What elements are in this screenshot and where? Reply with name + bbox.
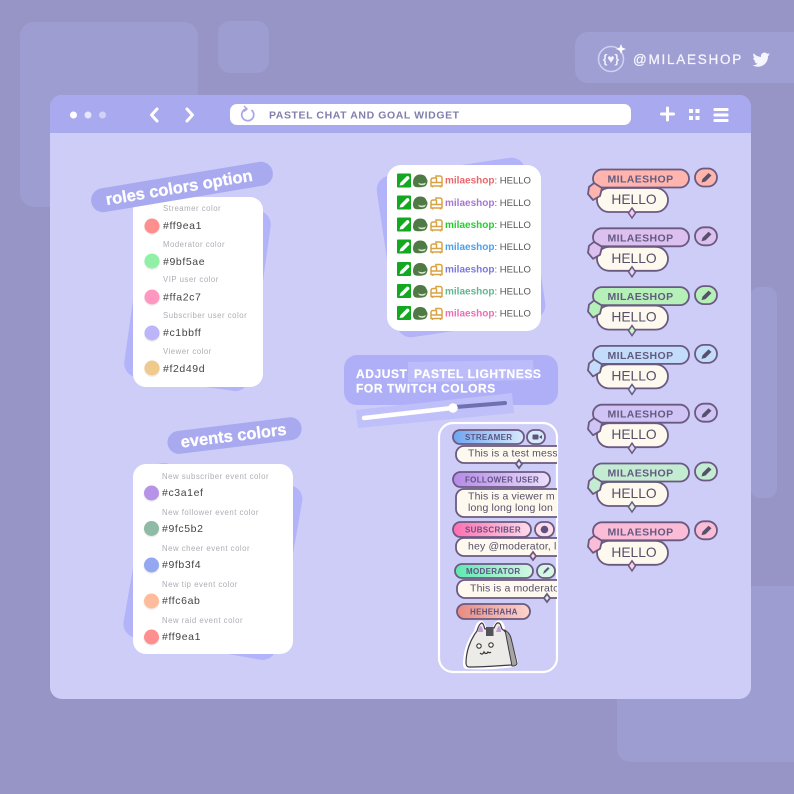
bubble: pink: HELLO <box>611 545 657 560</box>
message: moderator: This is a moderato <box>470 582 559 594</box>
bubble: mint <box>588 462 717 512</box>
message: follower user <box>452 471 557 518</box>
window controls <box>660 106 728 122</box>
event colour list: #9fb3f4 <box>162 559 201 571</box>
bubble: blue <box>588 345 717 394</box>
heading: events colors: events colors <box>180 421 288 452</box>
callout: adjust pastel lightness: ADJUST <box>356 367 408 381</box>
role colour list <box>144 204 247 377</box>
role colour list: Moderator color <box>163 240 225 249</box>
bubble: purple: HELLO <box>611 251 657 266</box>
icon: milaeshop logo <box>598 44 626 72</box>
event colour list: New follower event color <box>162 508 259 517</box>
callout: adjust pastel lightness: FOR TWITCH COLORS <box>356 382 496 396</box>
bubble: purple: MILAESHOP <box>607 232 674 244</box>
bubble: lavender: HELLO <box>611 427 657 442</box>
event colour list: New subscriber event color <box>162 472 269 481</box>
browser window <box>50 95 751 699</box>
role colour list: VIP user color <box>163 275 219 284</box>
address bar <box>230 104 631 125</box>
bubble: lavender <box>588 404 717 453</box>
bubble: mint: MILAESHOP <box>607 468 674 480</box>
event colour list <box>144 472 269 646</box>
bubble: peach: MILAESHOP <box>607 174 674 186</box>
message: subscriber <box>453 522 576 560</box>
message: follower user: FOLLOWER USER <box>465 476 539 484</box>
callout: adjust pastel lightness: PASTEL LIGHTNESS <box>414 367 542 381</box>
chat rows: milaeshop: HELLO <box>445 286 531 298</box>
bubble: blue: HELLO <box>611 368 657 383</box>
bubble: green: HELLO <box>611 310 657 325</box>
panel: events colors <box>121 416 305 662</box>
title bar <box>50 95 751 133</box>
chat rows: milaeshop: HELLO <box>445 264 531 276</box>
chat rows: milaeshop: HELLO <box>445 176 531 186</box>
pill: hehehaha: HEHEHAHA <box>470 608 518 616</box>
bubble: peach <box>588 168 717 218</box>
event colour list: #ffc6ab <box>162 595 200 607</box>
message: moderator: MODERATOR <box>466 567 520 576</box>
role colour list: Viewer color <box>163 347 212 356</box>
heading: roles colors option <box>89 160 275 214</box>
pill: hehehaha <box>457 604 530 619</box>
message: streamer: This is a test mess <box>468 448 558 460</box>
role colour list: #9bf5ae <box>163 256 205 268</box>
chat rows: milaeshop: HELLO <box>445 308 531 320</box>
panel: alert chat phone preview <box>438 422 558 674</box>
panel: roles colors option <box>89 160 275 393</box>
event colour list: New cheer event color <box>162 544 250 553</box>
event colour list: New tip event color <box>162 580 238 589</box>
role colour list: #ffa2c7 <box>163 292 201 304</box>
role colour list: Streamer color <box>163 204 221 213</box>
role colour list: #f2d49d <box>163 363 205 375</box>
bubble: pink <box>588 521 717 571</box>
heading: roles colors option: roles colors option <box>104 167 254 209</box>
handle text: @MILAESHOP <box>633 52 743 67</box>
icon: twitter bird <box>752 53 770 67</box>
heading: events colors <box>166 416 303 455</box>
bubble: peach: HELLO <box>611 192 657 207</box>
chat rows <box>397 174 531 320</box>
chat rows: milaeshop: HELLO <box>445 198 531 209</box>
lightness slider <box>356 393 514 428</box>
message: subscriber: SUBSCRIBER <box>465 526 521 534</box>
icon: cat tote bag mascot <box>463 620 518 669</box>
icon: milaeshop logo: {♥} <box>603 52 620 66</box>
bubble: green <box>588 286 717 336</box>
address bar: PASTEL CHAT AND GOAL WIDGET <box>269 110 460 122</box>
event colour list: #c3a1ef <box>162 487 204 499</box>
role colour list: #c1bbff <box>163 327 201 339</box>
message: moderator <box>454 563 557 604</box>
event colour list: New raid event color <box>162 616 243 625</box>
bubble: blue: MILAESHOP <box>607 350 674 362</box>
event colour list: #9fc5b2 <box>162 523 204 535</box>
panel: twitch chat preview <box>375 156 547 339</box>
chat rows: milaeshop: HELLO <box>445 242 531 253</box>
badge list: milaeshop chat bubbles <box>588 168 717 571</box>
message: follower user: This is a viewer m <box>468 490 555 502</box>
message: subscriber: hey @moderator, l <box>468 540 556 552</box>
bubble: lavender: MILAESHOP <box>607 409 674 421</box>
message: streamer <box>453 430 576 468</box>
chat rows: milaeshop: HELLO <box>445 220 531 231</box>
role colour list: #ff9ea1 <box>163 220 202 232</box>
event colour list: #ff9ea1 <box>162 631 201 643</box>
bubble: purple <box>588 227 717 277</box>
bubble: pink: MILAESHOP <box>607 526 674 538</box>
message: follower user: long long long lon <box>468 502 553 514</box>
role colour list: Subscriber user color <box>163 311 247 320</box>
social handle panel <box>575 32 794 83</box>
message: streamer: STREAMER <box>465 433 512 442</box>
bubble: mint: HELLO <box>611 486 657 501</box>
callout: adjust pastel lightness <box>344 355 558 428</box>
bubble: green: MILAESHOP <box>607 291 674 303</box>
